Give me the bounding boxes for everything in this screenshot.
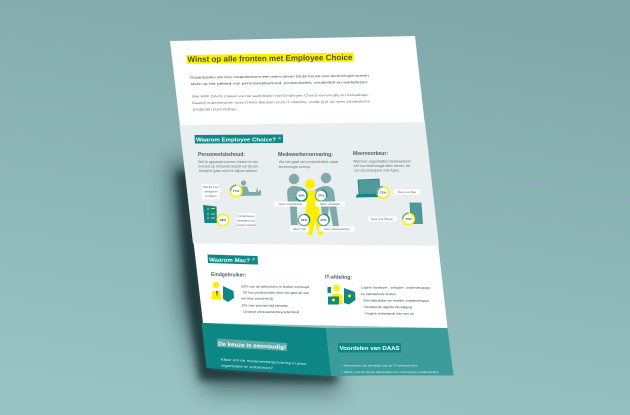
stat: 72 percent: 72% <box>380 191 386 195</box>
panel: voordelen van daas <box>326 328 454 376</box>
column: meervoorkeur: zelf hun technologie laten kiezen, kie- <box>354 164 412 168</box>
list: daas voordelen: • Vermindert de werklast van je IT-werknemers <box>342 364 418 368</box>
list: it-afdeling voordelen: · Lagere hardware-, software-, ondersteunings- <box>359 286 431 290</box>
column: medewerkerservaring: Medewerkerservaring: <box>278 152 333 158</box>
label: meer samenwerking: Meer samenwerking <box>324 227 350 231</box>
list: eindgebruiker voordelen: · Grotere werknemerstevredenheid <box>241 310 299 314</box>
list: eindgebruiker voordelen: · 59% van de gebruikers is sneller overtuigd <box>239 285 309 289</box>
heading: waarom mac <box>208 254 258 264</box>
stat: 35 percent samenwerking: 35% <box>320 218 327 222</box>
title: Winst op alle fronten met Employee Choice <box>187 53 353 64</box>
stat: 68 percent: 68% <box>298 194 305 198</box>
document page <box>170 36 454 376</box>
panel: waarom employee choice <box>180 122 439 246</box>
callout: standaard: Uit dat keuze <box>238 214 255 218</box>
callout: standaard: moeten worden <box>237 223 257 227</box>
callout: kans om te blijven: Met 62,5 km <box>203 185 219 189</box>
icon: it staff with devices <box>328 285 356 304</box>
callout: standaard <box>234 213 257 228</box>
page sheet <box>170 36 448 328</box>
icon: phone <box>410 203 422 224</box>
column: it-afdeling <box>325 275 431 316</box>
intro paragraph 2: projecten kunt richten. <box>193 108 238 112</box>
column: eindgebruiker: Eindgebruiker: <box>211 272 246 279</box>
column: meervoorkeur: Wanneer organisaties medewerkers <box>353 160 411 164</box>
callout: kans om te blijven <box>202 184 222 200</box>
heading: waarom employee choice: [1] <box>278 136 281 140</box>
label: kiest voor mac: Kiest voor Mac <box>398 190 417 194</box>
list: it-afdeling voordelen: · Verbeterde digitale beveiliging <box>362 305 412 309</box>
call to action text: Klaar om de medewerkerservaring in jouw <box>220 358 307 366</box>
list: daas voordelen <box>342 364 439 374</box>
icon: person on bed <box>240 180 261 196</box>
stat: 77 percent: 77% <box>233 189 239 193</box>
figure: right person <box>314 173 339 226</box>
section: waarom mac <box>208 254 431 316</box>
icon: tablet <box>203 205 217 223</box>
stat: 35 percent trots: 35% <box>301 218 307 222</box>
column: it-afdeling: IT-afdeling: <box>325 275 352 281</box>
heading: waarom mac: [2] <box>252 257 255 261</box>
intro paragraph 2: Daarbij ondersteunen onze DAAS-diensten jouw IT-afdeling, zodat jij je op meer strategische <box>192 99 370 105</box>
panel: de keuze is eenvoudig <box>202 323 331 376</box>
list: it-afdeling voordelen: en operationele kosten <box>361 292 396 296</box>
column: personeelsbehoud <box>198 152 261 228</box>
figure: left person <box>287 174 308 225</box>
label: meer creativiteit: Meer creativiteit <box>320 202 340 206</box>
heading: voordelen van daas: Voordelen van DAAS <box>340 346 400 352</box>
intro paragraph 2: Met ARP DAAS maken we het aanbieden van Employee Choice eenvoudig en betaalbaar. <box>192 93 369 98</box>
callout: kans om te blijven: te blijven <box>205 194 217 198</box>
label: kiest voor iphone: Kiest voor iPhone <box>371 217 393 221</box>
column: meervoorkeur <box>353 151 422 225</box>
intro paragraph 1: sterk op het gebied van personeelsbehoud, productiviteit, creativiteit en werkplezier. <box>190 80 369 86</box>
list: it-afdeling voordelen: · Hogere restwaarde dan een pc <box>363 312 414 316</box>
stat: 37 percent: 37% <box>318 194 324 198</box>
list: daas voordelen: • Werk met de beste apparaten en verhoog je productiviteit <box>342 370 439 374</box>
intro paragraph 2 <box>192 93 370 112</box>
column: personeelsbehoud: Personeelsbehoud: <box>198 152 245 158</box>
list: eindgebruiker voordelen: een Mac toeneemt [3] <box>241 297 273 301</box>
label: meer trots: Meer trots <box>293 227 306 231</box>
list: it-afdeling voordelen <box>359 286 431 316</box>
list: eindgebruiker voordelen: · 20% meer personeel blijft behouden <box>240 304 288 308</box>
icon: end user with device <box>212 282 234 302</box>
page shadow <box>170 160 340 392</box>
intro paragraph 1: Organisaties die hun medewerkers een stem geven bij de keuze van technologie scoren <box>190 74 369 79</box>
label: meer productiviteit: Meer productiviteit <box>279 202 302 206</box>
heading: de keuze is eenvoudig: De keuze is eenvoudig! <box>218 342 286 351</box>
call to action text: organisatie te verbeteren? <box>221 364 273 370</box>
callout: standaard: standaard zou <box>237 218 255 222</box>
column: meervoorkeur: zen zij consequent voor Apple. <box>354 168 400 172</box>
column: personeelsbehoud: invloed op iemands besluit om bij een <box>198 164 259 168</box>
column: personeelsbehoud: Stel je apparaat kunnen kiezen is van <box>198 160 258 164</box>
column: medewerkerservaring <box>274 152 355 235</box>
icon: laptop <box>356 179 382 198</box>
column: medewerkerservaring: Als het gaat om productiviteit, staat <box>279 160 338 164</box>
intro paragraph 1 <box>190 74 369 86</box>
heading: waarom employee choice: Waarom Employee Choice? <box>196 138 277 144</box>
list: eindgebruiker voordelen: · 50 hun productiviteit door het gebruik van <box>241 291 309 295</box>
list: it-afdeling voordelen: · Gemakkelijker en sneller implementatie <box>361 299 429 303</box>
figure: centre person <box>304 179 323 235</box>
column: meervoorkeur: Meervoorkeur: <box>353 151 388 157</box>
column: eindgebruiker <box>211 272 309 314</box>
heading: waarom employee choice <box>194 134 283 144</box>
call to action text <box>220 358 307 370</box>
callout: kans om te blijven: werkgever <box>205 190 218 194</box>
stat: 98 percent: 98% <box>220 218 226 222</box>
stat: 75 percent: 75% <box>405 217 412 221</box>
list: eindgebruiker voordelen <box>239 285 309 314</box>
column: medewerkerservaring: technologie voorop. <box>279 165 311 169</box>
column: personeelsbehoud: bedrijf te gaan en/of te blijven werken. <box>199 169 258 173</box>
heading: waarom mac: Waarom Mac? <box>209 258 251 264</box>
